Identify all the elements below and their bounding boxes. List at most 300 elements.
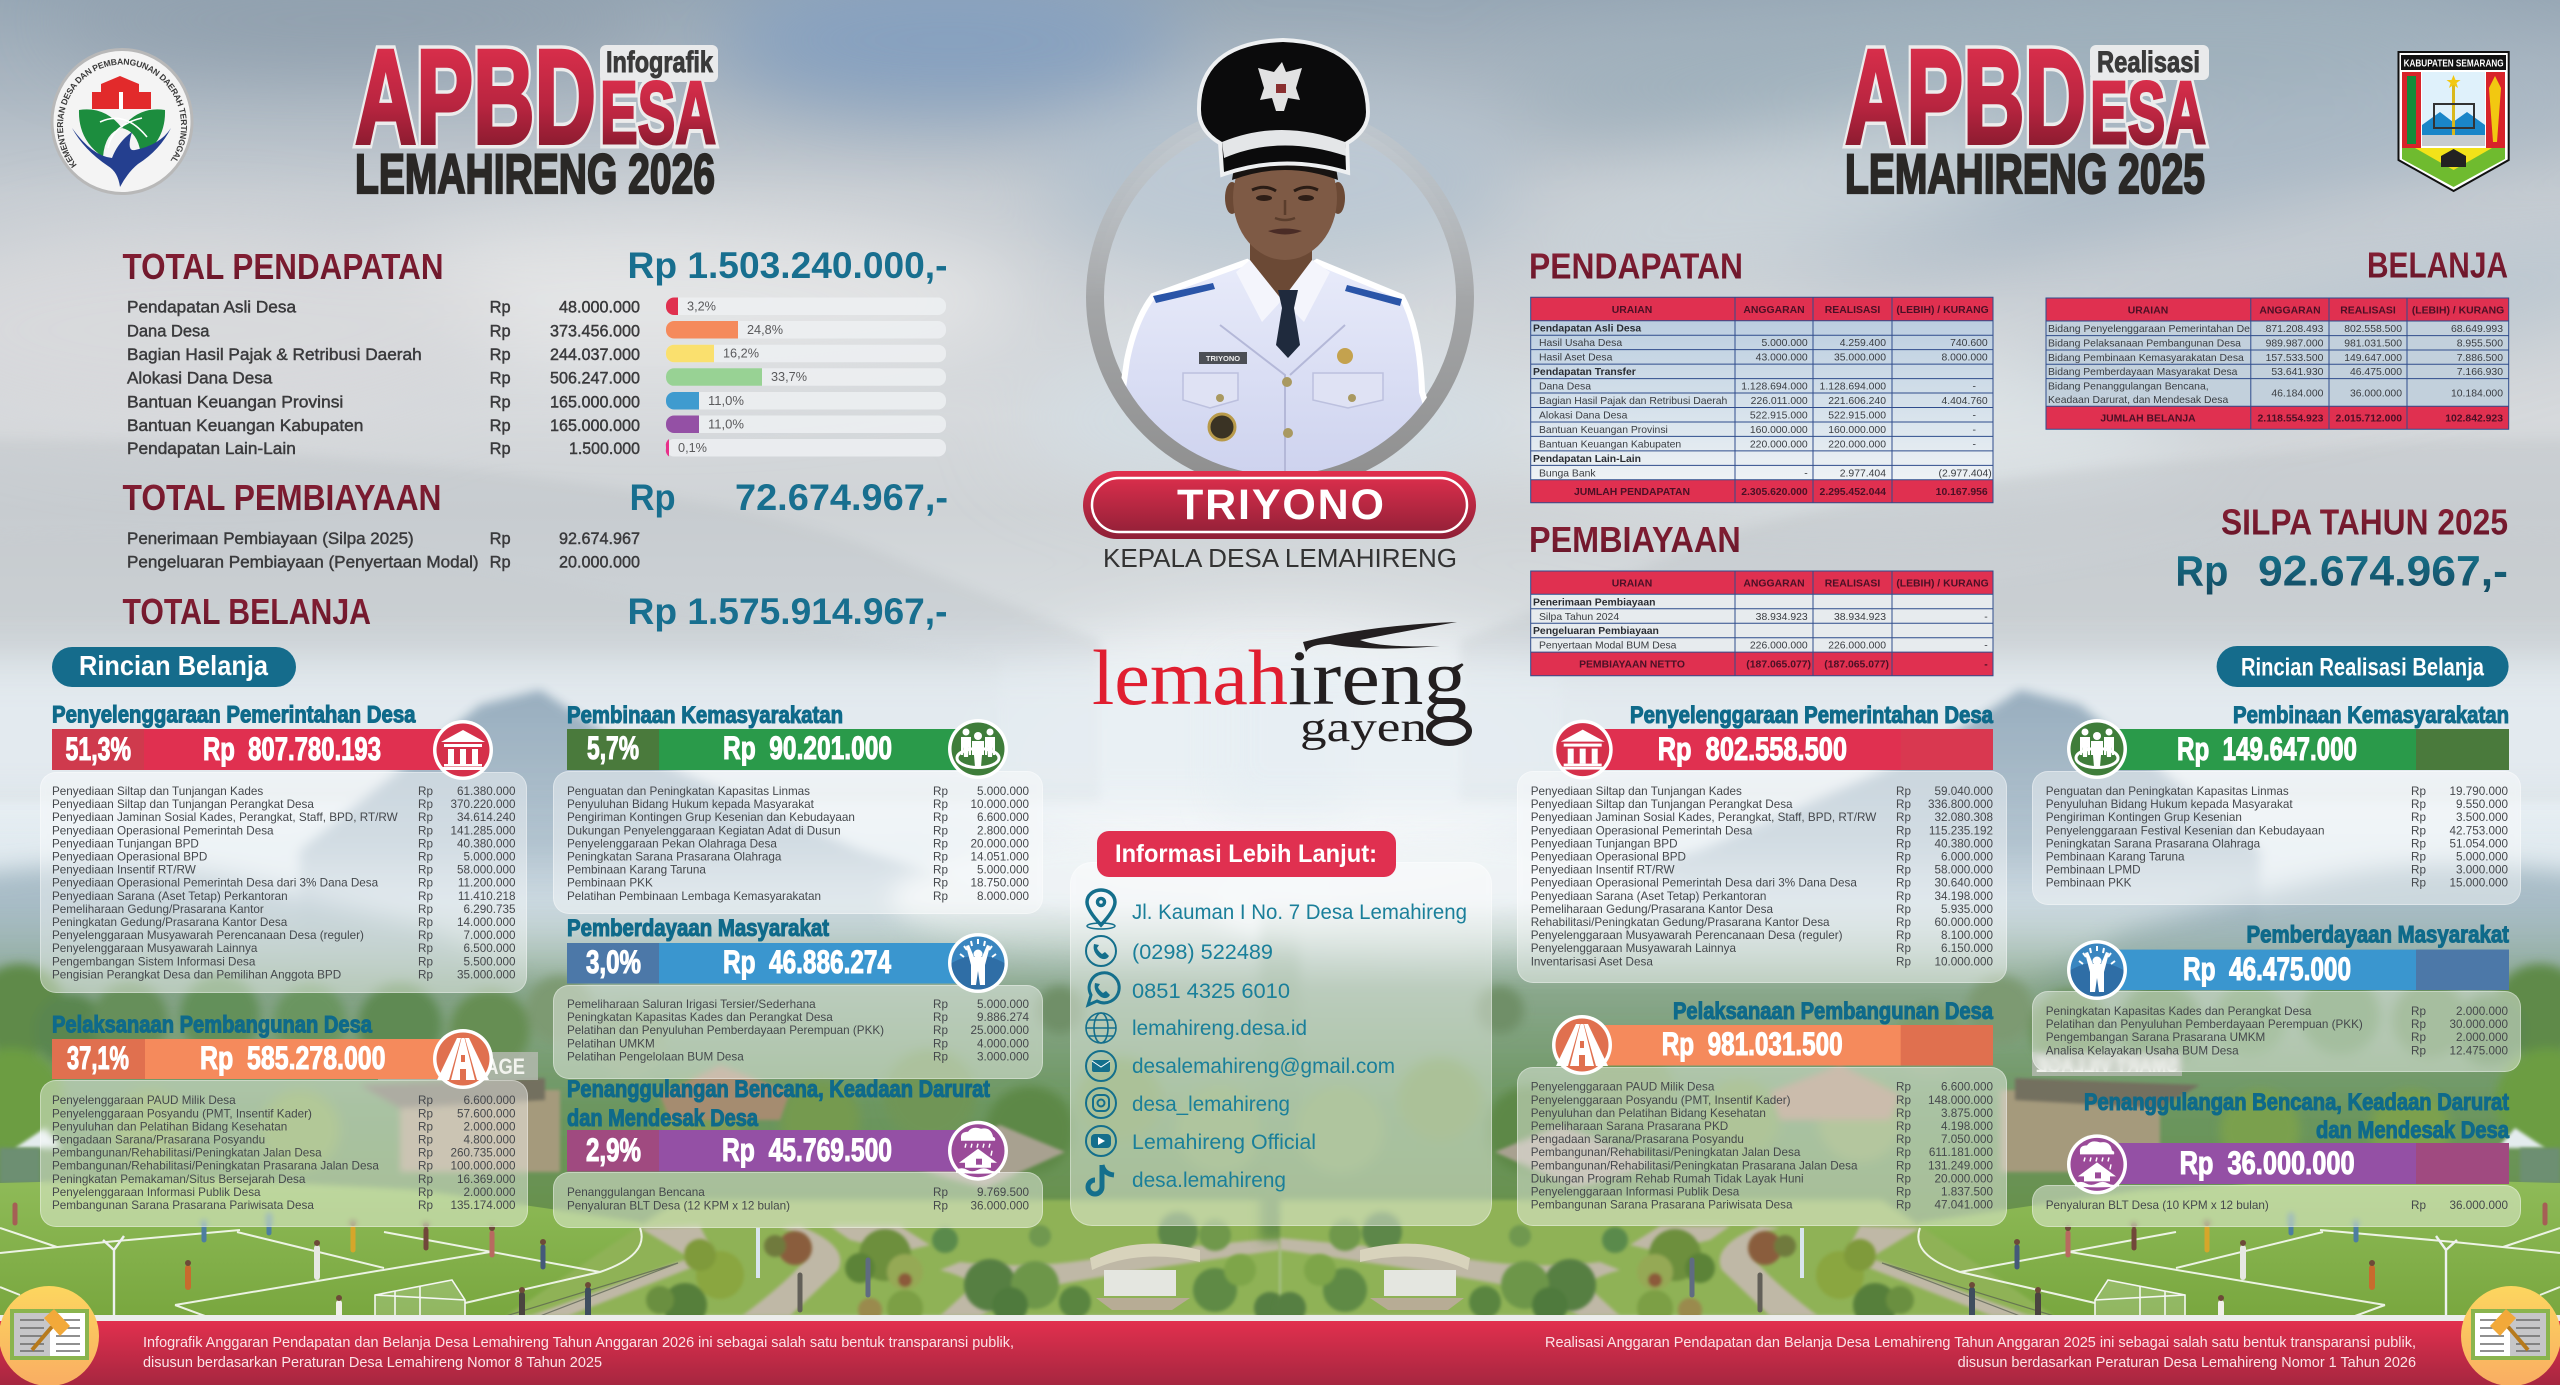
table: pendapatan 2025: 35.000.000	[1834, 353, 1886, 364]
section: pelaksanaan pembangunan 2026: Rp	[418, 1186, 433, 1199]
sign: smart village left: SMART VILLAGE	[375, 1054, 525, 1079]
section: pemberdayaan masyarakat 2026: 4.000.000	[977, 1037, 1029, 1050]
section: pemberdayaan masyarakat 2026: Pelatihan Pengelolaan BUM Desa	[567, 1050, 744, 1063]
section: penyelenggaraan pemerintahan 2025: Rp	[1896, 890, 1911, 903]
section: pelaksanaan pembangunan 2026: Rp	[418, 1147, 433, 1160]
table: belanja 2025: JUMLAH BELANJA	[2100, 414, 2196, 424]
glass panel: contact	[1070, 862, 1492, 1226]
section: penanggulangan bencana 2026: Penyaluran BLT Desa (12 KPM x 12 bulan)	[567, 1199, 790, 1212]
cap	[1201, 42, 1366, 172]
pendapatan rows and progress bars: 373.456.000	[550, 321, 640, 340]
section: pemberdayaan masyarakat 2025: 2.000.000	[2456, 1031, 2508, 1044]
pendapatan rows and progress bars: Rp	[490, 368, 511, 388]
table: pembiayaan 2025: 38.934.923	[1756, 612, 1808, 623]
pendapatan rows and progress bars: 24,8%	[747, 322, 783, 337]
section: penyelenggaraan pemerintahan 2026: 6.500.000	[464, 942, 516, 955]
section: penyelenggaraan pemerintahan 2026: 7.000.000	[464, 929, 516, 942]
footer note right: disusun berdasarkan Peraturan Desa Lemahireng Nomor 1 Tahun 2026	[1958, 1355, 2416, 1371]
pill: rincian realisasi belanja: Rincian Realisasi Belanja	[2241, 654, 2485, 682]
section: penyelenggaraan pemerintahan 2026: 11.200.000	[458, 877, 516, 890]
section: pemberdayaan masyarakat 2025: Rp	[2411, 1005, 2426, 1018]
section: penyelenggaraan pemerintahan 2025: Rp	[1896, 916, 1911, 929]
table: pendapatan 2025: 220.000.000	[1750, 439, 1808, 450]
section: pelaksanaan pembangunan 2026: Penyelenggaraan Informasi Publik Desa	[52, 1186, 261, 1199]
section: penyelenggaraan pemerintahan 2025: 115.235.192	[1929, 824, 1993, 837]
section: penyelenggaraan pemerintahan 2026: Penyediaan Sarana (Aset Tetap) Perkantoran	[52, 890, 288, 903]
glass panel: penyelenggaraan 2025	[1517, 771, 2007, 983]
table: belanja 2025: 7.886.500	[2457, 353, 2503, 364]
table: pembiayaan 2025: URAIAN	[1612, 578, 1652, 590]
title: apbdesa 2026: LEMAHIRENG 2026	[355, 142, 715, 205]
contact list: desalemahireng@gmail.com	[1132, 1055, 1395, 1078]
section: pembinaan kemasyarakatan 2025: Pembinaan Karang Taruna	[2046, 850, 2185, 864]
table: belanja 2025: 7.166.930	[2457, 367, 2503, 378]
section: pemberdayaan masyarakat 2026: Rp	[933, 1037, 948, 1050]
icon: road	[1552, 1015, 1612, 1075]
section: pembinaan kemasyarakatan 2025: Rp	[2411, 850, 2426, 864]
section: pembinaan kemasyarakatan 2026: 8.000.000	[977, 890, 1029, 903]
section: pelaksanaan pembangunan 2025: 1.837.500	[1941, 1186, 1993, 1198]
section: penyelenggaraan pemerintahan 2025: 32.080.308	[1934, 811, 1993, 824]
section: penanggulangan bencana 2026: 2,9%	[586, 1132, 641, 1168]
section: penyelenggaraan pemerintahan 2026: 11.410.218	[458, 890, 516, 903]
section: pembinaan kemasyarakatan 2025: Rp	[2411, 785, 2426, 798]
section: pembinaan kemasyarakatan 2026: 18.750.000	[970, 877, 1029, 890]
section: penyelenggaraan pemerintahan 2026: Pengembangan Sistem Informasi Desa	[52, 955, 256, 968]
neck and collar	[1236, 235, 1330, 358]
table: pendapatan 2025: JUMLAH PENDAPATAN	[1574, 487, 1690, 498]
section: pembinaan kemasyarakatan 2026: Rp	[933, 811, 948, 824]
section: pelaksanaan pembangunan 2026: 16.369.000	[457, 1173, 516, 1186]
footer band	[0, 1315, 2560, 1385]
footer note right	[1545, 1335, 2416, 1371]
section: penyelenggaraan pemerintahan 2026: 370.220.000	[450, 798, 516, 811]
section: penyelenggaraan pemerintahan 2026: 141.285.000	[450, 824, 516, 837]
section: pemberdayaan masyarakat 2025: Rp	[2411, 1018, 2426, 1031]
footer note left: disusun berdasarkan Peraturan Desa Lemahireng Nomor 8 Tahun 2025	[143, 1355, 602, 1371]
section: penyelenggaraan pemerintahan 2025: 6.150.000	[1941, 942, 1993, 955]
section: pelaksanaan pembangunan 2025: Penyelenggaraan PAUD Milik Desa	[1531, 1081, 1715, 1094]
section: pemberdayaan masyarakat 2025: 2.000.000	[2456, 1005, 2508, 1018]
section: pembinaan kemasyarakatan 2025: Pembinaan Kemasyarakatan	[2233, 702, 2509, 729]
section: penyelenggaraan pemerintahan 2025: Penyelenggaraan Musyawarah Lainnya	[1531, 942, 1737, 955]
section: pembinaan kemasyarakatan 2025: 19.790.000	[2450, 785, 2508, 798]
section: pelaksanaan pembangunan 2026: Pembangunan/Rehabilitasi/Peningkatan Jalan Desa	[52, 1147, 322, 1160]
table: pembiayaan 2025: 38.934.923	[1834, 612, 1886, 623]
section: penyelenggaraan pemerintahan 2025: 336.800.000	[1928, 798, 1993, 811]
table: pendapatan 2025: Pendapatan Asli Desa	[1533, 324, 1641, 335]
title: apbdesa 2025: ESA	[2090, 63, 2206, 162]
kementerian logo: KEMENTERIAN DESA DAN PEMBANGUNAN DAERAH TERTINGGAL	[57, 58, 187, 168]
table: pendapatan 2025: 522.915.000	[1828, 410, 1886, 422]
section: penyelenggaraan pemerintahan 2025: Penyediaan Insentif RT/RW	[1531, 864, 1674, 877]
pendapatan rows and progress bars: 506.247.000	[550, 368, 640, 388]
heading: pembiayaan 2025: PEMBIAYAAN	[1529, 519, 1741, 560]
table: pendapatan 2025: Hasil Aset Desa	[1539, 353, 1613, 364]
section: penanggulangan bencana 2026: Penanggulangan Bencana, Keadaan Darurat	[567, 1076, 990, 1103]
pendapatan rows and progress bars: Rp	[490, 439, 511, 458]
section: pembinaan kemasyarakatan 2025: Penyuluhan Bidang Hukum kepada Masyarakat	[2046, 798, 2293, 811]
section: penyelenggaraan pemerintahan 2025: Rp	[1896, 877, 1911, 890]
pendapatan rows and progress bars: Rp	[490, 298, 511, 316]
section: pemberdayaan masyarakat 2026: Rp	[933, 1050, 948, 1063]
pendapatan rows and progress bars: Pendapatan Asli Desa	[127, 298, 297, 316]
table: belanja 2025: ANGGARAN	[2259, 306, 2321, 316]
section: penyelenggaraan pemerintahan 2026: Rp	[418, 850, 433, 864]
section: penyelenggaraan pemerintahan 2025: 40.380.000	[1934, 837, 1993, 850]
section: pelaksanaan pembangunan 2025: Rp	[1896, 1094, 1911, 1107]
section: pelaksanaan pembangunan 2025: 611.181.000	[1929, 1146, 1993, 1159]
title: apbdesa 2026: ESA	[600, 63, 716, 162]
section: penyelenggaraan pemerintahan 2025: Penyediaan Operasional Pemerintah Desa dari 3% Dana Desa	[1531, 877, 1857, 890]
table: pendapatan 2025: Bantuan Keuangan Kabupaten	[1539, 439, 1681, 450]
pendapatan rows and progress bars	[127, 298, 946, 458]
section: penyelenggaraan pemerintahan 2026: Rp	[418, 824, 433, 837]
section: pelaksanaan pembangunan 2025: Penyuluhan dan Pelatihan Bidang Kesehatan	[1531, 1107, 1766, 1120]
total pembiayaan: TOTAL PEMBIAYAAN	[122, 477, 442, 518]
section: pembinaan kemasyarakatan 2025: Rp	[2411, 811, 2426, 824]
table: pembiayaan 2025: Penerimaan Pembiayaan	[1533, 597, 1655, 608]
pendapatan rows and progress bars: Pendapatan Lain-Lain	[127, 439, 296, 458]
name banner: TRIYONO	[1177, 481, 1384, 529]
section: penyelenggaraan pemerintahan 2026: Penyediaan Operasional Pemerintah Desa	[52, 824, 274, 837]
section: pelaksanaan pembangunan 2026: Peningkatan Pemakaman/Situs Bersejarah Desa	[52, 1173, 306, 1186]
silpa tahun 2025: Rp	[2175, 547, 2228, 595]
section: penyelenggaraan pemerintahan 2026: 51,3%	[66, 731, 131, 767]
footer note left	[143, 1335, 1014, 1371]
section: pemberdayaan masyarakat 2025	[2046, 922, 2509, 1057]
table: pembiayaan 2025: Pengeluaran Pembiayaan	[1533, 626, 1659, 637]
table: pendapatan 2025: 2.305.620.000	[1741, 487, 1808, 498]
table: pembiayaan 2025: Silpa Tahun 2024	[1539, 612, 1619, 623]
section: pemberdayaan masyarakat 2026: 9.886.274	[977, 1011, 1029, 1024]
section: pelaksanaan pembangunan 2026: Penyuluhan dan Pelatihan Bidang Kesehatan	[52, 1120, 287, 1133]
icon: tiktok	[1088, 1165, 1114, 1194]
section: penyelenggaraan pemerintahan 2025	[1531, 702, 1994, 968]
table: belanja 2025: 68.649.993	[2451, 324, 2503, 335]
face	[1225, 136, 1345, 260]
section: penyelenggaraan pemerintahan 2025: Penyediaan Sarana (Aset Tetap) Perkantoran	[1531, 890, 1766, 903]
pendapatan rows and progress bars: 0,1%	[678, 440, 707, 455]
portrait: village head	[1122, 38, 1427, 471]
section: pelaksanaan pembangunan 2026: Pembangunan/Rehabilitasi/Peningkatan Prasarana Jalan Desa	[52, 1160, 379, 1173]
section: pelaksanaan pembangunan 2025: Pembangunan/Rehabilitasi/Peningkatan Prasarana Jalan Desa	[1531, 1159, 1858, 1172]
heading: pendapatan 2025: PENDAPATAN	[1529, 246, 1743, 287]
section: pembinaan kemasyarakatan 2026: Pelatihan Pembinaan Lembaga Kemasyarakatan	[567, 890, 821, 903]
total pendapatan: Rp 1.503.240.000,-	[628, 245, 948, 286]
section: pelaksanaan pembangunan 2025: Dukungan Program Rehab Rumah Tidak Layak Huni	[1531, 1172, 1804, 1185]
section: pemberdayaan masyarakat 2025: Analisa Kelayakan Usaha BUM Desa	[2046, 1044, 2239, 1057]
table: pendapatan 2025: REALISASI	[1825, 305, 1880, 316]
table: pembiayaan 2025: Penyertaan Modal BUM Desa	[1539, 641, 1677, 652]
section: penyelenggaraan pemerintahan 2026: Penyediaan Operasional BPD	[52, 850, 207, 864]
section: penyelenggaraan pemerintahan 2026: Rp	[418, 968, 433, 981]
table: belanja 2025: Bidang Pemberdayaan Masyarakat Desa	[2048, 367, 2238, 378]
icon: community	[948, 719, 1008, 779]
section: penyelenggaraan pemerintahan 2025: Penyediaan Operasional BPD	[1531, 850, 1686, 864]
kabupaten semarang emblem: KABUPATEN SEMARANG	[2404, 58, 2504, 70]
total belanja: Rp 1.575.914.967,-	[628, 591, 948, 632]
section: pelaksanaan pembangunan 2026: Rp	[418, 1120, 433, 1133]
total pembiayaan: 92.674.967	[559, 529, 640, 548]
section: penyelenggaraan pemerintahan 2025: Rp	[1896, 929, 1911, 942]
section: pelaksanaan pembangunan 2025: 131.249.000	[1928, 1159, 1993, 1172]
section: penyelenggaraan pemerintahan 2026: 35.000.000	[457, 968, 516, 981]
pendapatan rows and progress bars: 165.000.000	[550, 392, 640, 411]
section: pelaksanaan pembangunan 2025: Pembangunan/Rehabilitasi/Peningkatan Jalan Desa	[1531, 1146, 1801, 1159]
sign: smart village mirrored: SMART VILLAGE	[2036, 1055, 2178, 1077]
table: belanja 2025: 46.475.000	[2350, 367, 2402, 378]
title: apbdesa 2025: APBD	[1845, 23, 2086, 172]
total pembiayaan: Penerimaan Pembiayaan (Silpa 2025)	[127, 529, 414, 548]
section: pembinaan kemasyarakatan 2026: 5.000.000	[977, 864, 1029, 877]
section: pelaksanaan pembangunan 2025: 4.198.000	[1941, 1120, 1993, 1133]
section: pemberdayaan masyarakat 2026: Pemberdayaan Masyarakat	[567, 915, 829, 942]
section: pembinaan kemasyarakatan 2025: 51.054.000	[2450, 837, 2508, 850]
section: pemberdayaan masyarakat 2026: Pemeliharaan Saluran Irigasi Tersier/Sederhana	[567, 998, 816, 1011]
icon: flood	[2067, 1134, 2127, 1194]
section: pelaksanaan pembangunan 2025: Rp 981.031.500	[1662, 1026, 1843, 1062]
section: pelaksanaan pembangunan 2025: Rp	[1896, 1081, 1911, 1094]
pendapatan rows and progress bars: Rp	[490, 392, 511, 411]
section: penanggulangan bencana 2026: 36.000.000	[970, 1199, 1029, 1212]
section: pemberdayaan masyarakat 2026: Rp	[933, 998, 948, 1011]
section: penyelenggaraan pemerintahan 2025: 60.000.000	[1934, 916, 1993, 929]
section: penanggulangan bencana 2025: dan Mendesak Desa	[2316, 1117, 2510, 1144]
section: penyelenggaraan pemerintahan 2026: Rp	[418, 877, 433, 890]
total pembiayaan: Pengeluaran Pembiayaan (Penyertaan Modal)	[127, 552, 479, 572]
portrait ring	[1095, 112, 1465, 482]
heading: belanja 2025: BELANJA	[2367, 244, 2508, 286]
section: pelaksanaan pembangunan 2026: Rp	[418, 1134, 433, 1146]
section: pembinaan kemasyarakatan 2026: Penyuluhan Bidang Hukum kepada Masyarakat	[567, 798, 815, 811]
section: penanggulangan bencana 2026: 9.769.500	[977, 1186, 1029, 1199]
table: pendapatan 2025: 4.259.400	[1840, 338, 1886, 349]
icon: flood	[948, 1121, 1008, 1181]
section: pembinaan kemasyarakatan 2026: Peningkatan Sarana Prasarana Olahraga	[567, 850, 782, 864]
pendapatan rows and progress bars: Rp	[490, 345, 511, 364]
section: pelaksanaan pembangunan 2026: Pembangunan Sarana Prasarana Pariwisata Desa	[52, 1199, 314, 1212]
section: penyelenggaraan pemerintahan 2025: Rp	[1896, 811, 1911, 824]
section: pelaksanaan pembangunan 2025: Pemeliharaan Sarana Prasarana PKD	[1531, 1120, 1728, 1133]
title: apbdesa 2026: APBD	[355, 23, 596, 172]
table: pendapatan 2025: Bantuan Keuangan Provinsi	[1539, 425, 1668, 436]
section: penanggulangan bencana 2025: Rp 36.000.000	[2180, 1145, 2355, 1181]
table: pendapatan 2025: 221.606.240	[1828, 396, 1886, 407]
table: pendapatan 2025: 1.128.694.000	[1820, 382, 1886, 393]
table: pendapatan 2025: 2.977.404	[1840, 468, 1886, 479]
section: pembinaan kemasyarakatan 2025: Rp	[2411, 877, 2426, 890]
title: apbdesa 2026: APBD	[355, 23, 596, 172]
table: pendapatan 2025: -	[1973, 410, 1976, 422]
table: pendapatan 2025: 220.000.000	[1828, 439, 1886, 450]
section: pembinaan kemasyarakatan 2025: Rp	[2411, 798, 2426, 811]
section: pembinaan kemasyarakatan 2025: Rp	[2411, 837, 2426, 850]
table: pendapatan 2025: Alokasi Dana Desa	[1539, 410, 1628, 422]
table: belanja 2025: 46.184.000	[2271, 388, 2324, 400]
table: belanja 2025: 2.015.712.000	[2336, 414, 2402, 424]
section: pemberdayaan masyarakat 2025: Pengembangan Sarana Prasarana UMKM	[2046, 1031, 2265, 1044]
icon: government building	[433, 720, 493, 780]
table: belanja 2025: 157.533.500	[2266, 353, 2324, 364]
kabupaten semarang emblem	[2398, 52, 2509, 191]
section: penyelenggaraan pemerintahan 2026: Rp	[418, 903, 433, 916]
section: pembinaan kemasyarakatan 2026: 10.000.000	[970, 798, 1029, 811]
section: pemberdayaan masyarakat 2026: Pelatihan UMKM	[567, 1037, 655, 1050]
section: pemberdayaan masyarakat 2025: Pelatihan dan Penyuluhan Pemberdayaan Perempuan (PKK)	[2046, 1018, 2363, 1031]
section: penyelenggaraan pemerintahan 2026: 61.380.000	[457, 785, 516, 798]
section: pelaksanaan pembangunan 2025: Pelaksanaan Pembangunan Desa	[1673, 998, 1994, 1025]
total pembiayaan: Rp	[630, 477, 676, 518]
title: apbdesa 2025: ESA	[2090, 63, 2206, 162]
table: belanja 2025: 102.842.923	[2445, 414, 2503, 424]
total belanja	[122, 591, 948, 632]
section: pelaksanaan pembangunan 2025: Pembangunan Sarana Prasarana Pariwisata Desa	[1531, 1199, 1793, 1212]
section: pembinaan kemasyarakatan 2026: Rp 90.201.000	[723, 730, 892, 766]
section: pemberdayaan masyarakat 2026: Rp	[933, 1011, 948, 1024]
icon: government building	[1553, 720, 1613, 780]
section: pembinaan kemasyarakatan 2026: Rp	[933, 877, 948, 890]
contact list: Lemahireng Official	[1132, 1131, 1316, 1154]
section: pelaksanaan pembangunan 2026: 6.600.000	[464, 1094, 516, 1107]
total belanja: TOTAL BELANJA	[122, 591, 371, 632]
glass panel: bencana 2026	[553, 1172, 1043, 1228]
title: apbdesa 2025: LEMAHIRENG 2025	[1845, 142, 2205, 205]
table: pendapatan 2025: -	[1973, 382, 1976, 393]
section: penyelenggaraan pemerintahan 2025: Penyelenggaraan Musyawarah Perencanaan Desa (reguler)	[1531, 929, 1843, 942]
icon: community	[2067, 719, 2127, 779]
section: pembinaan kemasyarakatan 2026: Rp	[933, 824, 948, 837]
table: pendapatan 2025: -	[1804, 468, 1808, 479]
section: pelaksanaan pembangunan 2026: 135.174.000	[450, 1199, 516, 1212]
section: pembinaan kemasyarakatan 2026: Penyelenggaraan Pekan Olahraga Desa	[567, 837, 777, 850]
section: penyelenggaraan pemerintahan 2026: Rp	[418, 785, 433, 798]
icon: empowered person	[948, 933, 1008, 993]
pendapatan rows and progress bars: Bantuan Keuangan Kabupaten	[127, 416, 363, 435]
glass panel: bencana 2025	[2032, 1185, 2521, 1227]
section: pemberdayaan masyarakat 2025: Rp 46.475.000	[2183, 951, 2351, 987]
section: pelaksanaan pembangunan 2025: 6.600.000	[1941, 1081, 1993, 1094]
table: pembiayaan 2025: 226.000.000	[1750, 641, 1808, 652]
section: pembinaan kemasyarakatan 2025: Rp	[2411, 864, 2426, 877]
section: pelaksanaan pembangunan 2025: 47.041.000	[1934, 1199, 1993, 1212]
section: pelaksanaan pembangunan 2026: Rp 585.278.000	[200, 1040, 386, 1076]
section: pembinaan kemasyarakatan 2026: Rp	[933, 837, 948, 850]
table: pendapatan 2025: URAIAN	[1612, 305, 1652, 316]
section: pelaksanaan pembangunan 2026: 2.000.000	[464, 1120, 516, 1133]
section: penyelenggaraan pemerintahan 2026: Rp	[418, 916, 433, 929]
icon: whatsapp	[1088, 973, 1119, 1005]
section: penyelenggaraan pemerintahan 2025: 5.935.000	[1941, 903, 1993, 916]
section: pembinaan kemasyarakatan 2026: Penguatan dan Peningkatan Kapasitas Linmas	[567, 785, 810, 798]
name banner	[1083, 471, 1476, 539]
total pembiayaan: 72.674.967,-	[735, 477, 948, 518]
table: belanja 2025: 53.641.930	[2271, 367, 2324, 378]
table: belanja 2025: Keadaan Darurat, dan Mendesak Desa	[2048, 395, 2228, 406]
section: pemberdayaan masyarakat 2025: 30.000.000	[2450, 1018, 2508, 1031]
pendapatan rows and progress bars: Dana Desa	[127, 321, 210, 340]
table: belanja 2025: 10.184.000	[2451, 388, 2503, 400]
section: pemberdayaan masyarakat 2026: Peningkatan Kapasitas Kades dan Perangkat Desa	[567, 1011, 833, 1024]
section: penyelenggaraan pemerintahan 2025: 8.100.000	[1941, 929, 1993, 942]
pendapatan rows and progress bars: Bantuan Keuangan Provinsi	[127, 392, 343, 411]
section: pelaksanaan pembangunan 2026: 100.000.000	[450, 1160, 516, 1173]
contact list: Jl. Kauman I No. 7 Desa Lemahireng	[1132, 901, 1467, 924]
glass panel: penyelenggaraan 2026	[40, 772, 527, 993]
section: penyelenggaraan pemerintahan 2025: Penyediaan Operasional Pemerintah Desa	[1531, 824, 1753, 837]
table: pendapatan 2025: 160.000.000	[1828, 425, 1886, 436]
section: pelaksanaan pembangunan 2025: Penyelenggaraan Informasi Publik Desa	[1531, 1186, 1740, 1198]
section: pelaksanaan pembangunan 2026: Pengadaan Sarana/Prasarana Posyandu	[52, 1134, 265, 1146]
section: pembinaan kemasyarakatan 2026: 14.051.000	[970, 850, 1029, 864]
section: penyelenggaraan pemerintahan 2026: Penyediaan Tunjangan BPD	[52, 837, 199, 850]
section: pelaksanaan pembangunan 2025: Pengadaan Sarana/Prasarana Posyandu	[1531, 1133, 1744, 1146]
contact list: desa_lemahireng	[1132, 1093, 1290, 1116]
brand logo: lemahireng gayeng: lemah	[1092, 634, 1288, 721]
table: pendapatan 2025: 160.000.000	[1750, 425, 1808, 436]
section: penyelenggaraan pemerintahan 2026: Rp	[418, 811, 433, 824]
section: pembinaan kemasyarakatan 2025: 5.000.000	[2456, 850, 2508, 864]
table: pendapatan 2025: 5.000.000	[1761, 338, 1808, 349]
section: pelaksanaan pembangunan 2025	[1531, 998, 1994, 1212]
contact list: lemahireng.desa.id	[1132, 1017, 1307, 1040]
section: pembinaan kemasyarakatan 2025: 3.000.000	[2456, 864, 2508, 877]
section: penyelenggaraan pemerintahan 2026: Rp 807.780.193	[203, 731, 381, 767]
table: belanja 2025	[2046, 298, 2509, 429]
section: pembinaan kemasyarakatan 2026: 6.600.000	[977, 811, 1029, 824]
table: pembiayaan 2025: ANGGARAN	[1743, 578, 1805, 590]
table: belanja 2025: URAIAN	[2128, 306, 2168, 316]
section: penanggulangan bencana 2025	[2046, 1089, 2510, 1212]
section: pembinaan kemasyarakatan 2026: Rp	[933, 864, 948, 877]
section: penyelenggaraan pemerintahan 2026: Rp	[418, 942, 433, 955]
section: pelaksanaan pembangunan 2026	[52, 1012, 516, 1212]
table: belanja 2025: 8.955.500	[2457, 338, 2503, 350]
section: penanggulangan bencana 2025: 36.000.000	[2450, 1199, 2508, 1212]
section: penyelenggaraan pemerintahan 2025: Rp	[1896, 955, 1911, 968]
section: penyelenggaraan pemerintahan 2026: Penyelenggaraan Musyawarah Lainnya	[52, 942, 258, 955]
table: pembiayaan 2025: (187.065.077)	[1746, 660, 1811, 670]
section: pembinaan kemasyarakatan 2025	[2046, 702, 2509, 890]
table: belanja 2025: Bidang Pembinaan Kemasyarakatan Desa	[2048, 353, 2244, 364]
section: pelaksanaan pembangunan 2026: Rp	[418, 1094, 433, 1107]
section: pembinaan kemasyarakatan 2026: Rp	[933, 798, 948, 811]
section: pemberdayaan masyarakat 2025: Rp	[2411, 1031, 2426, 1044]
glass panel: pembinaan 2026	[553, 771, 1043, 914]
footer note left: Infografik Anggaran Pendapatan dan Belanja Desa Lemahireng Tahun Anggaran 2026 ini sebagai salah satu bentuk transparansi publik,	[143, 1335, 1014, 1351]
table: pembiayaan 2025: PEMBIAYAAN NETTO	[1579, 660, 1685, 670]
table: pendapatan 2025: 10.167.956	[1936, 487, 1988, 498]
section: penyelenggaraan pemerintahan 2025: 59.040.000	[1934, 785, 1993, 798]
section: penyelenggaraan pemerintahan 2025: Pemeliharaan Gedung/Prasarana Kantor Desa	[1531, 903, 1774, 916]
total pembiayaan: 20.000.000	[559, 552, 640, 572]
table: pendapatan 2025: 43.000.000	[1756, 353, 1808, 364]
section: penyelenggaraan pemerintahan 2026: 40.380.000	[457, 837, 516, 850]
pendapatan rows and progress bars: 1.500.000	[569, 439, 640, 458]
table: pendapatan 2025: 522.915.000	[1750, 410, 1808, 422]
table: pembiayaan 2025: (187.065.077)	[1824, 660, 1889, 670]
section: pelaksanaan pembangunan 2025: Rp	[1896, 1107, 1911, 1120]
pendapatan rows and progress bars: Bagian Hasil Pajak & Retribusi Daerah	[127, 345, 422, 364]
section: penyelenggaraan pemerintahan 2025: Penyelenggaraan Pemerintahan Desa	[1630, 702, 1994, 729]
section: pembinaan kemasyarakatan 2025: 9.550.000	[2456, 798, 2508, 811]
contact list	[1086, 890, 1467, 1194]
table: belanja 2025: 2.118.554.923	[2258, 414, 2324, 424]
pendapatan rows and progress bars: 48.000.000	[559, 298, 640, 316]
table: pendapatan 2025: 740.600	[1950, 338, 1988, 349]
total pembiayaan: Rp	[490, 529, 511, 548]
section: penyelenggaraan pemerintahan 2025: Penyediaan Tunjangan BPD	[1531, 837, 1678, 850]
